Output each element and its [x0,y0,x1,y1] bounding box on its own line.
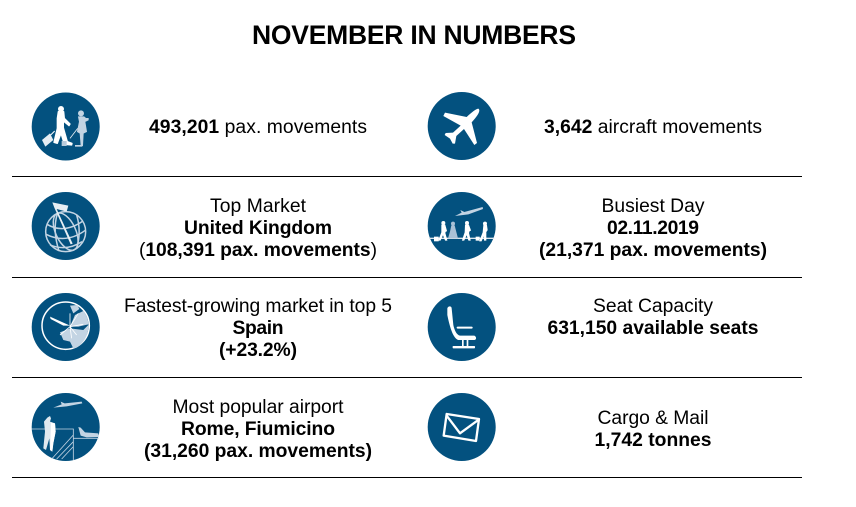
pax movements stat: 493,201 pax. movements [149,117,367,138]
icon: globe with flag [32,192,100,260]
fastest-growing market stat: Spain [232,318,284,339]
seat capacity stat: Seat Capacity [593,296,713,317]
fastest-growing market stat [124,296,392,361]
top market stat [139,196,377,261]
icon: aircraft [428,92,496,160]
most popular airport stat: Rome, Fiumicino [181,419,335,440]
icon: airport viewers [32,393,100,461]
busiest day stat: Busiest Day [602,196,705,217]
icon: envelope [428,393,496,461]
icon: busiest day travellers [428,192,496,260]
seat capacity stat: 631,150 available seats [548,318,758,339]
busiest day stat: (21,371 pax. movements) [539,240,767,261]
icon: world map with aeroplane [32,293,100,361]
fastest-growing market stat: (+23.2%) [219,340,297,361]
most popular airport stat [144,397,372,462]
most popular airport stat: (31,260 pax. movements) [144,441,372,462]
most popular airport stat: Most popular airport [172,397,344,418]
top market stat: (108,391 pax. movements) [139,240,377,261]
icon: passengers with luggage [32,92,100,160]
busiest day stat [539,196,767,261]
top market stat: United Kingdom [184,218,332,239]
icon: seat [428,293,496,361]
busiest day stat: 02.11.2019 [607,218,699,239]
seat capacity stat [548,296,758,339]
fastest-growing market stat: Fastest-growing market in top 5 [124,296,392,317]
top market stat: Top Market [210,196,307,217]
cargo and mail stat: 1,742 tonnes [594,430,712,451]
title: NOVEMBER IN NUMBERS [252,20,576,50]
cargo and mail stat [594,408,712,451]
cargo and mail stat: Cargo & Mail [598,408,708,429]
aircraft movements stat: 3,642 aircraft movements [544,117,762,138]
